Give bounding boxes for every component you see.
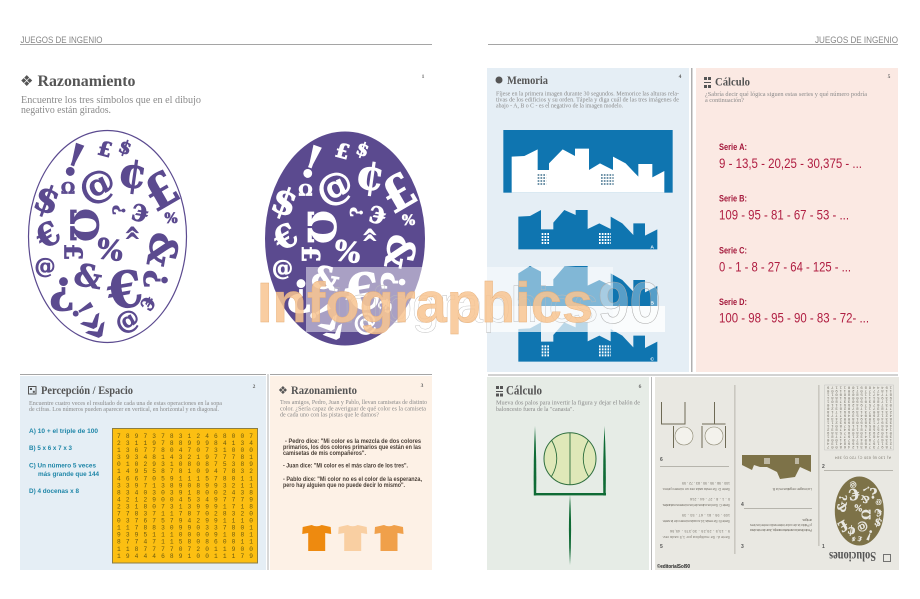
number grid: 1 3 6 7 7 8 0 4 7 0 7 3 1 0 0 0 [117,447,253,454]
puzzle oval: negative symbols: € [265,215,305,260]
puzzle oval: outlined symbols: ¿ [49,262,75,314]
puzzle oval: negative symbols: $ [266,178,303,226]
solution: matchstick figures [662,402,726,448]
solution: number grid: 1 9 4 4 4 6 8 9 1 0 0 1 1 1 7 9 [826,384,892,388]
list of operations: D) 4 docenas x 8 [29,488,79,495]
panel: Memoria [487,68,692,372]
solution: series answers text: 9 - 13,5 - 20,25 - 30,375 - 45,56 [670,529,730,533]
solution: series answers text: Serie D: Se resta cada vez un número primo. [662,487,730,491]
solution: series answers text: 0 - 1 - 8 - 27 - 64 - 216 [690,497,730,501]
puzzle oval: outlined symbols: @ [109,301,145,339]
number grid: 0 3 7 6 7 5 7 9 4 2 9 9 1 1 1 0 [117,518,253,525]
series B: Serie B: [719,194,747,204]
solution: oval: ¿ [869,487,877,503]
image: option C skyline [518,322,657,363]
text block: basket instructions [496,400,640,413]
list of operations: más grande que 144 [38,471,99,478]
text block: series instructions: a continuación? [705,98,744,104]
solution: oval: £ [834,516,851,535]
series B [719,194,849,222]
number grid: 1 1 8 7 7 7 7 0 7 2 0 1 1 9 0 0 [117,546,253,553]
puzzle oval: negative symbols: ! [302,298,337,326]
solution: series answers text: 109 - 95 - 81 - 67 - 53 - 39 [682,513,730,517]
solution: panel numbers: 5 [660,544,663,550]
solution: number grid: 2 3 1 8 0 7 3 1 3 9 9 9 1 7 1 8 [826,409,892,413]
puzzle oval: negative symbols: & [375,231,426,273]
text block: instructions [29,384,256,413]
series D: 100 - 98 - 95 - 90 - 83 - 72- ... [719,310,869,326]
panel: Soluciones [655,377,899,570]
puzzle oval: negative symbols: ¿ [380,272,418,290]
image: option B skyline [518,266,657,306]
watermark: Infographics90: 90 [598,271,661,336]
solution: oval [834,476,884,546]
solution: oval: @ [855,519,870,535]
solution: series answers text: 100 - 98 - 95 - 90 - 83 - 72 - 59 [682,481,730,485]
solution: panel numbers: 6 [660,457,663,463]
icon: medium shirt [374,525,404,551]
solution: number grid: 4 6 6 7 0 5 9 1 1 1 5 7 8 0 1 1 [826,423,892,427]
puzzle oval: outlined symbols: ¿ [111,205,131,215]
text block: clues: camisetas de mis compañeros". [283,450,366,457]
panel: Percepcion / Espacio [20,374,266,570]
puzzle oval: outlined symbols: ¿ [142,270,180,288]
figure: matchstick hoop [534,426,606,565]
solution: oval: $ [872,515,884,530]
series D: Serie D: [719,297,747,307]
solution: shirts answer text: Pedro lleva la camiseta naranja, Juan la más clara [750,528,812,532]
header: left page: JUEGOS DE INGENIO [20,35,102,46]
text block: Razonamiento instructions: negativo están girados. [21,105,111,116]
solution: number grid: 1 4 9 5 5 8 7 8 1 0 9 4 7 8 3 2 [826,426,892,430]
solution: oval: € [872,504,884,518]
image: option A skyline: A [650,244,654,250]
puzzle oval: negative symbols: € [339,260,385,324]
image: model skyline [503,130,673,193]
solution: shirts answer text: amigos. [802,518,812,522]
series C: 0 - 1 - 8 - 27 - 64 - 125 - ... [719,258,851,274]
solution: series answers text [662,481,730,539]
heading: Soluciones upside down: Soluciones [829,548,876,563]
heading: Memoria: Memoria [507,75,548,87]
series C: Serie C: [719,246,747,256]
solution: skyline [742,455,811,479]
solution: oval: ! [862,484,872,492]
solution: answers row: A) 130 B) 630 C) 720 D) 384 [835,456,891,460]
heading: Memoria: 4 [679,74,682,80]
puzzle oval: negative symbols: @ [272,256,293,280]
puzzle oval: outlined symbols: » [66,300,128,352]
puzzle oval: negative symbols: ¿ [348,207,368,217]
text block: series instructions [705,92,867,104]
text block: Memoria instructions [496,91,679,109]
panel: Razonamiento small [268,374,432,570]
heading: Razonamiento main: 1 [422,74,425,80]
icon: orange shirt [302,525,331,551]
puzzle oval: outlined symbols: & [138,229,188,271]
puzzle oval: outlined symbols: € [130,197,151,227]
number grid: 1 4 9 5 5 8 7 8 1 0 9 4 7 8 3 2 [117,468,253,475]
solution: number grid: 2 3 1 1 9 7 8 8 9 9 9 8 4 1 3 4 [826,440,892,444]
panel: Calculo basket [487,374,898,570]
puzzle oval: negative symbols: ¢ [353,149,388,201]
text block: clues: primarios, los dos colores primarios que están en las [283,444,421,451]
puzzle oval: negative symbols: £ [333,138,352,164]
number grid: 0 1 0 2 9 3 1 0 8 0 8 7 5 3 8 9 [117,461,253,468]
image: option A skyline [518,210,657,250]
puzzle oval: outlined symbols: £ [134,160,188,222]
heading: Calculo series: Cálculo [715,74,750,88]
number grid: 3 9 3 4 8 1 4 3 2 1 9 7 7 7 8 1 [117,454,253,461]
logo: editorial Sol90: ©editorialSol90 [657,563,690,570]
heading: Percepcion / Espacio: Percepción / Espacio [41,383,133,397]
heading: Razonamiento main: Razonamiento [38,73,136,90]
solution: number grid: 1 1 8 7 7 7 7 0 7 2 0 1 1 9 0 0 [826,388,892,392]
text block: Memoria instructions: Fíjese en la primera imagen durante 30 segundos. Memorice las alturas rela- [496,91,679,97]
number grid: 2 3 1 1 9 7 8 8 9 9 9 8 4 1 3 4 [117,440,253,447]
solution: oval: @ [848,479,859,491]
text block: basket instructions: Mueva dos palos para invertir la figura y dejar el balón de [496,400,640,407]
solution: oval: Ω [860,509,874,520]
solution: panel numbers: 1 [822,544,825,550]
solution: series answers text: Serie B: Se resta 14 a cada número de la serie. [662,519,730,523]
solution: number grid: 0 1 0 2 9 3 1 0 8 0 8 7 5 3 8 9 [826,430,892,434]
puzzle oval: outlined symbols: ! [56,134,92,188]
series C [719,246,851,274]
text block: Razonamiento instructions: Encuentre los tres símbolos que en el dibujo [21,95,201,106]
series A [719,142,862,171]
puzzle oval: outlined symbols: ! [65,296,99,324]
solution: shirts answer text: y Pablo la de color intermedio entre los tres [750,523,812,527]
puzzle oval: outlined symbols: $ [28,176,66,224]
list of operations: C) Un número 5 veces [29,462,96,470]
watermark: Infographics90: Infographics [257,271,593,335]
puzzle oval: outlined symbols: @ [34,254,56,278]
solution: oval: € [847,484,862,505]
puzzle oval: negative symbols: » [304,302,365,354]
heading: Calculo basket: 6 [639,384,642,390]
puzzle oval: negative symbols: £ [296,246,325,262]
heading: Memoria [496,74,682,87]
icon: dice square [28,386,36,394]
puzzle oval: outlined symbols: @ [72,158,122,212]
heading: Calculo basket: Cálculo [506,384,542,398]
puzzle oval: outlined symbols: $ [116,136,134,160]
puzzle oval: negative symbols: £ [371,162,426,224]
text block: clues: - Pablo dice: "Mi color no es el color de la esperanza, [283,476,422,483]
series D [719,297,869,326]
solution: number grid: 4 2 1 2 9 0 0 4 5 3 4 9 7 7 7 9 [826,412,892,416]
heading: Razonamiento small: ❖ [278,384,288,397]
puzzle oval: negative symbols: $ [353,138,372,162]
puzzle oval: negative symbols: Ω [298,180,313,200]
puzzle oval: outlined symbols: % [164,211,178,227]
puzzle oval: negative symbols: € [367,199,389,229]
heading: Razonamiento main [20,72,425,90]
puzzle oval: outlined symbols: » [117,225,147,241]
number grid: 2 3 1 8 0 7 3 1 3 9 9 9 1 7 1 8 [117,504,253,510]
list of operations: A) 10 + el triple de 100 [29,428,98,435]
solution: number grid: 1 1 7 8 8 3 0 9 9 0 3 3 7 8 0 1 [826,398,892,402]
puzzle oval: negative symbols: % [332,234,363,270]
solution: oval: £ [857,534,863,542]
solution: number grid: 9 3 9 5 1 1 1 0 0 0 0 9 1 8 8 1 [826,395,892,399]
number grid: 4 2 1 2 9 0 0 4 5 3 4 9 7 7 7 9 [117,496,253,503]
puzzle oval: outlined symbols: £ [58,244,88,260]
heading: Soluciones upside down [829,548,890,563]
solution: number grid: 7 8 9 7 3 7 8 3 1 2 4 6 8 0 0 7 [826,444,892,448]
text block: Memoria instructions: tivas de los edificios y su orden. Tápela y diga cuál de las tres imágenes de [496,96,679,103]
solution: series answers text: Serie A: Se multiplica por 1,5 cada vez. [662,535,730,539]
heading: Razonamiento small: Razonamiento [291,383,357,397]
text block: shirts instructions: color. ¿Sería capaz de averiguar de qué color es la camiseta [280,406,426,412]
text block: clues: pero hay alguien que no puede decir lo mismo". [283,482,405,489]
number grid [112,428,258,563]
heading: Calculo series: 5 [888,74,891,80]
heading: Razonamiento small [278,383,424,397]
text block: shirts instructions: de cada uno con las pistas que le damos? [280,412,379,418]
series A: 9 - 13,5 - 20,25 - 30,375 - ... [719,155,862,171]
text block: basket instructions: baloncesto fuera de la "canasta". [496,406,574,413]
puzzle oval: outlined symbols: Ω [61,178,75,198]
puzzle oval: outlined symbols [28,130,188,352]
puzzle oval: negative symbols: @ [309,160,360,214]
solution: shirts answer text [750,518,812,532]
solution: panel numbers: 4 [741,502,744,508]
puzzle oval: negative symbols: % [402,213,415,229]
watermark: Infographics90: Infographics [330,277,598,333]
text block: clues: - Juan dice: "Mi color es el más claro de los tres". [283,462,408,470]
icon: light shirt [338,525,367,551]
solution: number grid: 0 3 7 6 7 5 7 9 4 2 9 9 1 1 1 0 [826,402,892,406]
list of operations: B) 5 x 6 x 7 x 3 [29,445,72,452]
solution: skyline caption: La imagen negativa es la B. [772,487,812,491]
panel: Calculo series [696,68,898,372]
puzzle oval: outlined symbols: £ [95,136,115,162]
heading: Razonamiento small: 3 [421,383,424,389]
solution: number grid: 8 3 4 0 3 0 3 9 1 8 0 0 2 4 3 8 [826,416,892,420]
solution: number grid [824,384,894,450]
number grid: 4 6 6 7 0 5 9 1 1 1 5 7 8 0 1 1 [117,475,253,482]
solution: oval: ¿ [837,495,848,501]
puzzle oval: negative symbols: @ [347,303,382,341]
image: option C skyline: C [650,357,654,363]
list of operations [29,428,99,495]
image: option B skyline: B [650,300,654,306]
puzzle oval: negative symbols: ¿ [287,264,312,316]
solution: oval: @ [875,498,882,506]
solution: number grid: 1 3 6 7 7 8 0 4 7 0 7 3 1 0 0 0 [826,437,892,441]
number grid: 9 3 9 5 1 1 1 0 0 0 0 9 1 8 8 1 [117,532,253,539]
text block: shirts instructions: Tres amigos, Pedro, Juan y Pablo, llevan camisetas de distinto [280,400,427,406]
heading: Calculo series [704,74,891,88]
puzzle oval: outlined symbols: Ω [62,208,106,242]
number grid: 3 3 9 7 1 3 8 9 0 8 9 9 3 2 1 1 [117,482,253,489]
solution: oval: ! [864,526,875,543]
text block: instructions: Encuentre cuatro veces el resultado de cada una de estas operaciones en la sopa [29,401,222,407]
text block: series instructions: ¿Sabría decir qué lógica siguen estas series y qué número podría [705,92,867,98]
solution: number grid: 7 7 8 3 7 1 1 7 8 7 0 2 8 3 2 0 [826,406,892,410]
number grid: 1 1 7 8 8 3 0 9 9 0 3 3 7 8 0 1 [117,525,253,532]
heading: Calculo basket [496,384,642,398]
solution: oval: ¢ [846,523,857,539]
puzzle oval: negative symbols: & [309,259,342,299]
solution: number grid: 3 9 3 4 8 1 4 3 2 1 9 7 7 7 8 1 [826,434,892,438]
puzzle oval: negative symbols [265,132,426,354]
number grid: 8 7 7 4 7 1 1 5 8 0 8 6 0 0 1 1 [117,539,253,546]
number grid: 8 3 4 0 3 0 3 9 1 8 0 0 2 4 3 8 [117,489,253,496]
solution: panel numbers: 2 [822,464,825,470]
solution: panel numbers [660,457,825,550]
text block: instructions: 2 [253,384,256,390]
text block: instructions: de cifras. Los números pueden aparecer en vertical, en horizontal y en diagonal. [29,406,219,413]
puzzle oval: outlined symbols: % [95,232,125,268]
solution: number grid: 3 3 9 7 1 3 8 9 0 8 9 9 3 2 1 1 [826,420,892,424]
puzzle oval: negative symbols: Ω [299,210,344,244]
puzzle oval: outlined symbols: € [102,258,147,322]
puzzle oval: outlined symbols: ¢ [115,147,151,199]
figure: basketball [544,433,596,485]
solution: oval: % [853,501,863,512]
text block: Razonamiento instructions [21,95,201,116]
solution: oval: $ [851,535,857,542]
solution: oval: & [834,500,850,513]
puzzle oval: negative symbols: ! [294,136,329,190]
series A: Serie A: [719,142,747,152]
series B: 109 - 95 - 81 - 67 - 53 - ... [719,206,849,222]
puzzle oval: negative symbols: € [372,293,397,316]
header: right page: JUEGOS DE INGENIO [815,35,898,46]
number grid: 7 8 9 7 3 7 8 3 1 2 4 6 8 0 0 7 [117,433,253,440]
heading: Razonamiento main: ❖ [20,72,33,90]
puzzle oval: outlined symbols: € [135,291,160,314]
puzzle oval: negative symbols: » [354,227,384,243]
text block: clues: - Pedro dice: "Mi color es la mezcla de dos colores [285,438,422,445]
solution: number grid: 8 7 7 4 7 1 1 5 8 0 8 6 0 0 1 1 [826,392,892,396]
puzzle oval: outlined symbols: € [28,213,67,258]
text block: clues [283,438,422,489]
puzzle oval: outlined symbols: & [71,257,105,297]
number grid: 7 7 8 3 7 1 1 7 8 7 0 2 8 3 2 0 [117,510,253,518]
solution: series answers text: Serie C: Son los cubos de los números naturales. [662,503,730,507]
solution: panel numbers: 3 [741,544,744,550]
number grid: 1 9 4 4 4 6 8 9 1 0 0 1 1 1 7 9 [117,553,253,560]
solution: oval: & [860,492,871,505]
text block: Memoria instructions: abajo - A, B o C - es el negativo de la imagen modelo. [496,103,623,109]
text block: shirts instructions [280,400,427,418]
